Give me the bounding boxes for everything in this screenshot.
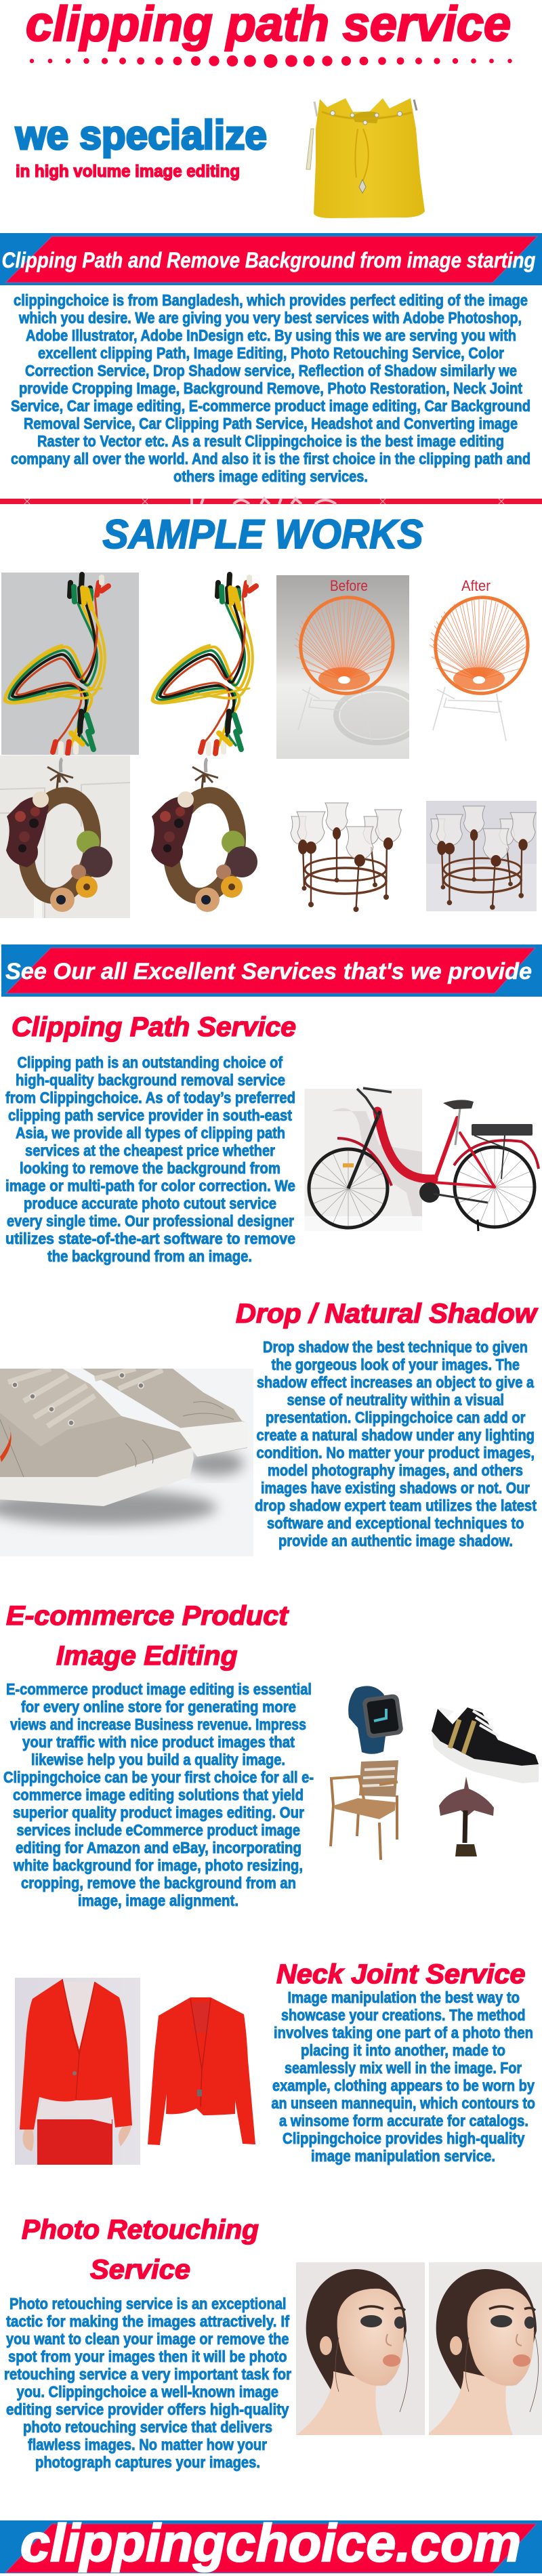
paragraph: E-commerce product image editing is essential [6,1680,312,1698]
paragraph: white background for image, photo resizing, [13,1856,303,1874]
paragraph [4,2295,291,2471]
dotted divider [30,54,512,68]
sample: chair before: Before [330,577,368,594]
paragraph: cropping, remove the background from an [21,1874,296,1892]
paragraph [5,1054,295,1265]
paragraph: image or multi-path for color correction. We [5,1177,295,1194]
heading: Photo Retouching [22,2215,259,2245]
banner: clipping path and remove background [0,233,542,285]
sample: chair after: After [461,577,491,594]
image: portrait before [296,2262,425,2435]
paragraph: likewise help you build a quality image. [31,1751,285,1768]
section: e-commerce product image editing [3,1601,539,1909]
sample: wires after [152,575,256,753]
paragraph: the background from an image. [47,1247,252,1265]
heading line two: Image Editing [56,1641,237,1671]
heading: E-commerce Product [6,1601,289,1631]
image: ghost mannequin red blazer [148,1997,255,2145]
paragraph: superior quality product images editing. Our [13,1804,304,1821]
paragraph: for every online store for generating more [21,1698,296,1716]
paragraph: looking to remove the background from [20,1159,280,1177]
sample: wreath before [0,755,130,918]
paragraph: from Clippingchoice. As of today’s preferred [5,1089,295,1106]
image: smart watch [348,1686,404,1754]
sample: wreath after [151,759,257,912]
footer banner: clippingchoice.com: clippingchoice.com [20,2513,521,2573]
heading: we specialize: we specialize [15,112,267,158]
heading line two: Service [90,2255,190,2285]
image: red bicycle [305,1088,539,1231]
paragraph: editing for Amazon and eBay, incorporating [16,1839,301,1856]
sample: wires before [1,573,139,755]
paragraph: image manipulation service. [311,2147,495,2165]
sample: chair before [276,575,420,759]
subheading: in high volume image editing: in high volume image editing [16,162,240,181]
heading: Clipping Path Service [12,1012,296,1042]
paragraph: Photo retouching service is an exceptional [9,2295,286,2312]
paragraph: tactic for making the images attractively. If [6,2312,289,2330]
paragraph: Asia, we provide all types of clipping path [16,1124,285,1142]
paragraph: Clipping path is an outstanding choice of [18,1054,283,1071]
paragraph: editing service provider offers high-quality [6,2401,289,2418]
paragraph: image, image alignment. [78,1892,238,1909]
paragraph: utilizes state-of-the-art software to remove [5,1230,295,1247]
paragraph: provide an authentic image shadow. [278,1532,513,1550]
paragraph: views and increase Business revenue. Impress [10,1716,306,1733]
paragraph [3,1680,314,1909]
banner: excellent services: See Our all Excellent Services that's we provide [5,959,532,984]
banner: excellent services [1,944,542,997]
sample: chair after [425,577,538,741]
paragraph: high-quality background removal service [16,1071,285,1089]
paragraph: placing it into another, made to [301,2041,505,2059]
text block: introduction: others image editing services. [173,468,368,485]
paragraph: spot from your images then it will be photo [8,2348,287,2365]
divider strip [0,499,542,504]
section: drop natural shadow [0,1299,539,1556]
paragraph: every single time. Our professional designer [7,1212,294,1230]
paragraph: commerce image editing solutions that yield [13,1786,304,1804]
section: photo retouching service [4,2215,542,2471]
paragraph: produce accurate photo cutout service [24,1194,276,1212]
heading: Drop / Natural Shadow [236,1299,539,1329]
paragraph: photo retouching service that delivers [23,2418,272,2436]
paragraph: services include eCommerce product image [16,1821,300,1839]
paragraph [255,1338,537,1550]
paragraph: clipping path service provider in south-east [8,1106,292,1124]
image: model wearing red blazer [15,1978,140,2165]
image: wooden chair [330,1760,398,1860]
paragraph: photograph captures your images. [35,2453,260,2471]
paragraph: flawless images. No matter how your [28,2436,267,2453]
sample: candle holder original [426,801,537,911]
paragraph: services at the cheapest price whether [25,1142,275,1159]
section: clipping path service [5,1012,539,1265]
image: black platform sneaker [431,1707,539,1783]
section: neck joint service [15,1959,535,2165]
paragraph: you. Clippingchoice a well-known image [16,2383,278,2401]
paragraph: Clippingchoice can be your first choice for all e- [3,1768,314,1786]
paragraph [271,1989,535,2165]
paragraph: sense of neutrality within a visual [287,1391,504,1409]
paragraph: your traffic with nice product images that [22,1733,295,1751]
heading: sample works: SAMPLE WORKS [103,512,423,557]
heading: Neck Joint Service [276,1959,526,1989]
icon: yellow bucket bag [306,98,425,218]
sample: candle holder cut out [291,803,402,912]
paragraph: you want to clean your image or remove the [6,2330,289,2348]
image: canvas shoes with shadow [0,1369,253,1556]
paragraph: retouching service a very important task for [4,2365,291,2383]
image: tiffany lamp [439,1777,494,1856]
image: portrait after [426,2262,542,2435]
text block: introduction [11,291,530,485]
